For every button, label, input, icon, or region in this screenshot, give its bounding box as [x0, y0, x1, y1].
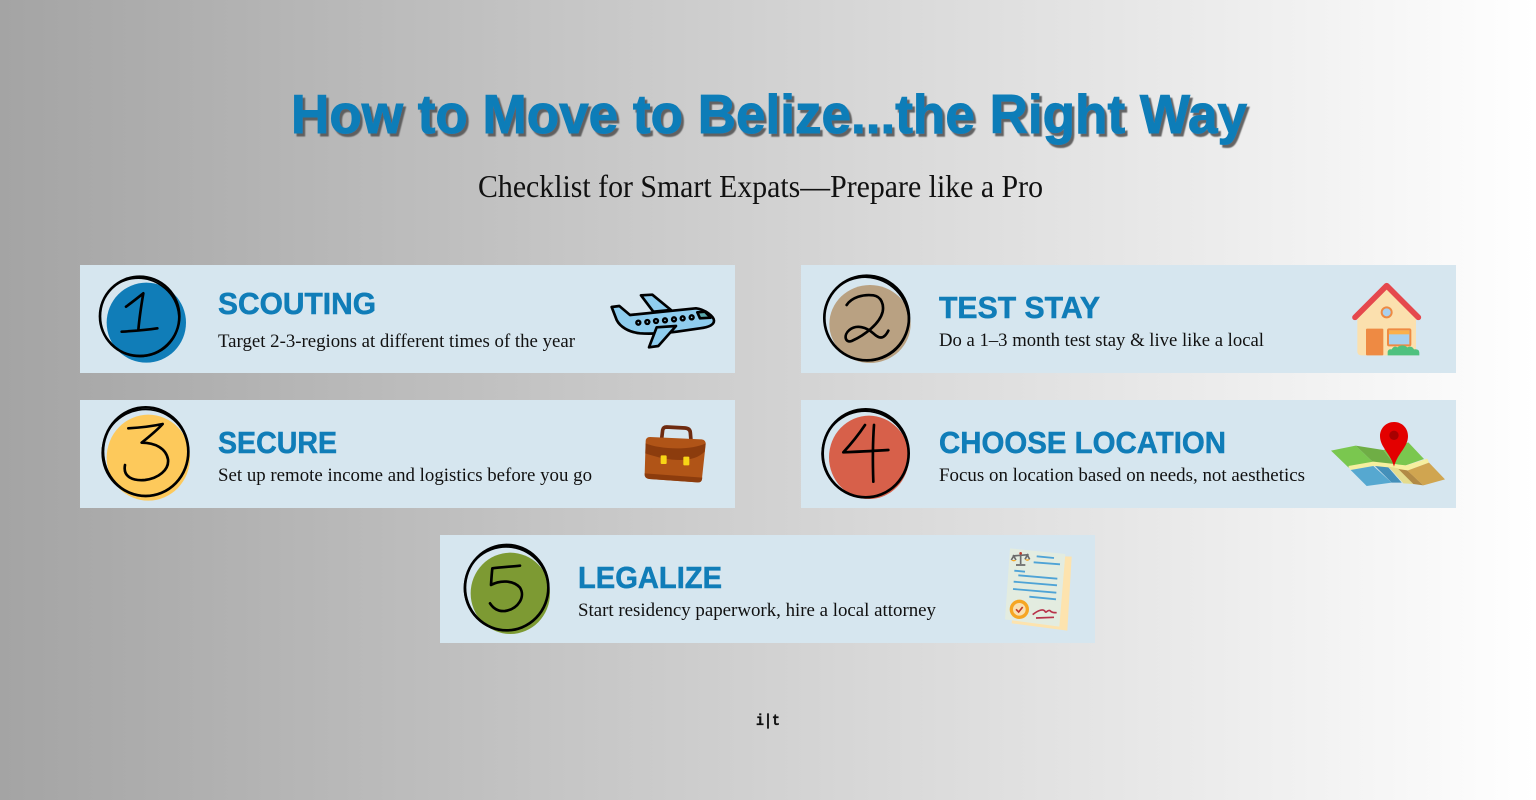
panel: step 3 secure [80, 393, 735, 513]
badge: number 2 [808, 261, 925, 377]
icon: house [1355, 286, 1419, 355]
badge: number 3 [85, 393, 205, 513]
panel: step 2 test stay [801, 261, 1456, 377]
badge: number 4 [805, 394, 925, 514]
description: secure: Set up remote income and logistics before you go [218, 465, 592, 486]
icon: map with pin [1331, 422, 1445, 486]
icon: legal document [1005, 548, 1072, 631]
footer logo: i|t [756, 712, 780, 730]
icon: airplane [612, 295, 714, 347]
heading: secure: SECURE [218, 425, 337, 460]
heading: scouting: SCOUTING [218, 286, 376, 321]
panel: step 1 scouting [80, 263, 735, 373]
description: test stay: Do a 1–3 month test stay & live like a local [939, 330, 1264, 351]
heading: choose location: CHOOSE LOCATION [939, 425, 1226, 460]
description: choose location: Focus on location based on needs, not aesthetics [939, 465, 1305, 486]
heading: test stay: TEST STAY [939, 290, 1100, 325]
description: scouting: Target 2-3-regions at different times of the year [218, 331, 576, 352]
panel: step 4 choose location [801, 394, 1456, 514]
badge: number 5 [448, 530, 565, 647]
icon: briefcase [645, 427, 706, 482]
title: How to Move to Belize...the Right Way [291, 83, 1247, 145]
badge: number 1 [84, 263, 194, 372]
description: legalize: Start residency paperwork, hire a local attorney [578, 600, 936, 621]
heading: legalize: LEGALIZE [578, 560, 722, 595]
subtitle: Checklist for Smart Expats—Prepare like a Pro [478, 168, 1043, 204]
panel: step 5 legalize [440, 530, 1095, 647]
